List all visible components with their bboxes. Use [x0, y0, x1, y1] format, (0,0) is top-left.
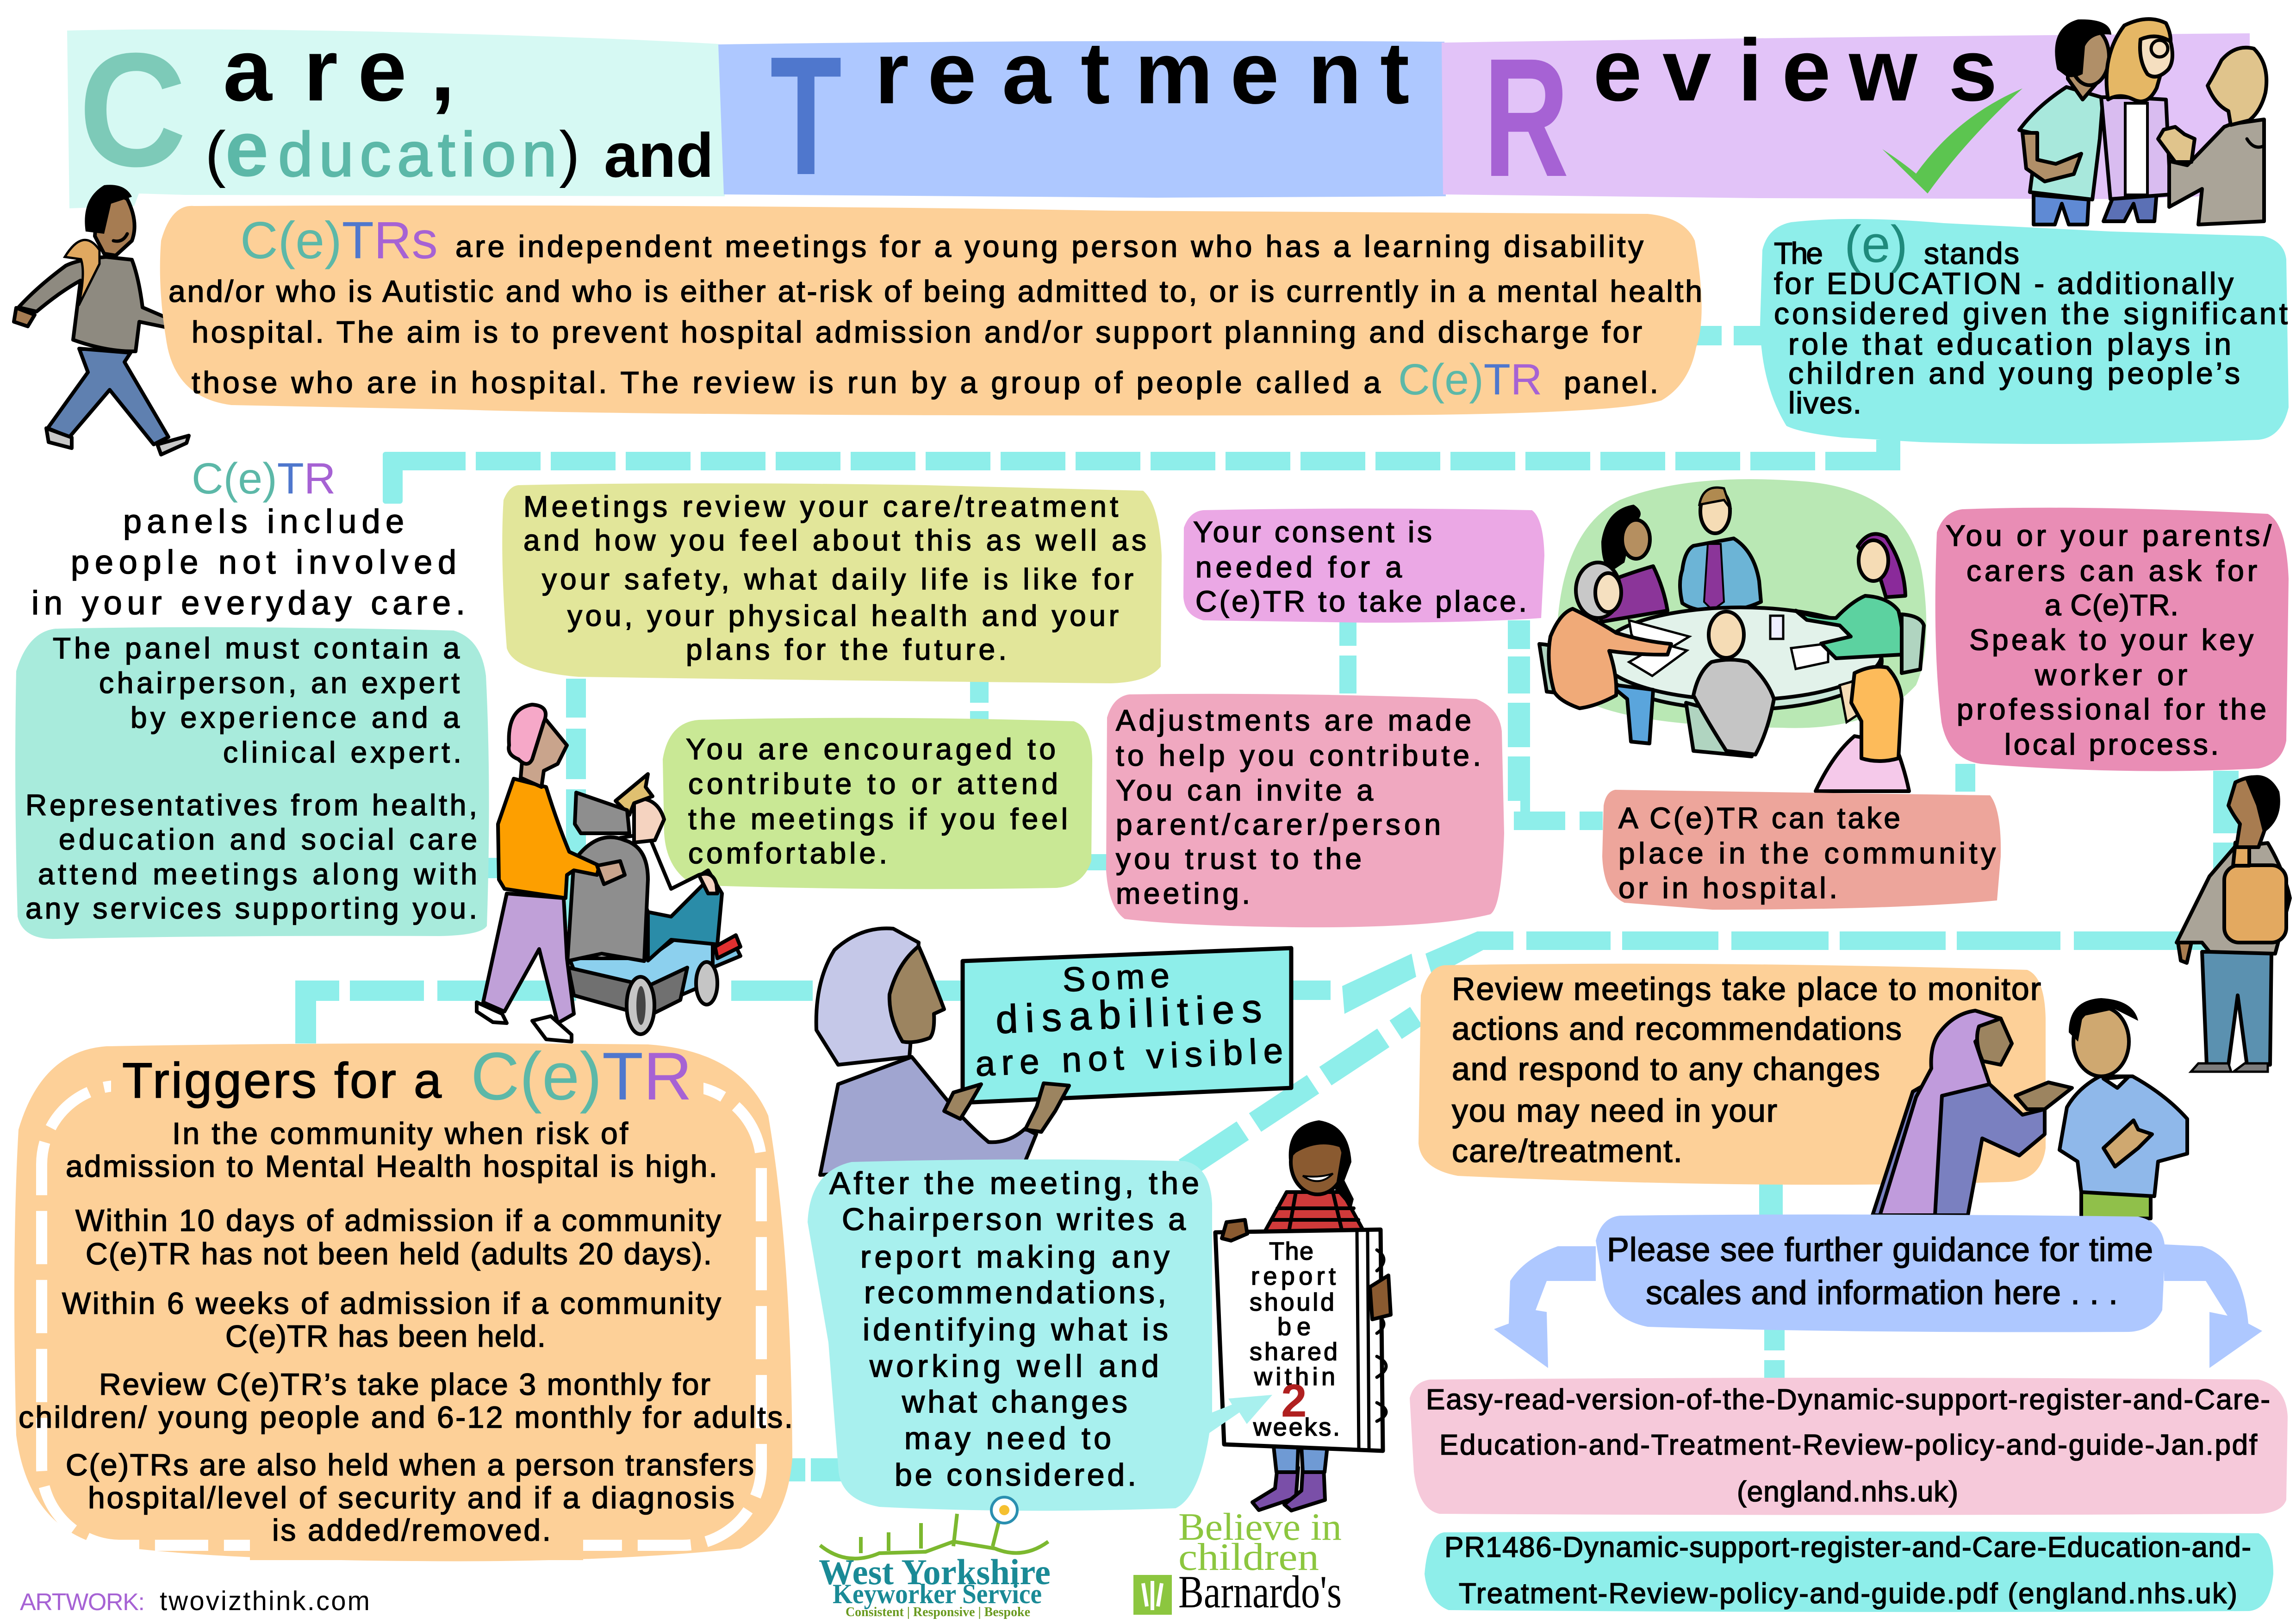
title word: education: ducation [278, 119, 557, 189]
text: you trust to the [1116, 842, 1362, 875]
arrow: from report box to notebook [1203, 1395, 1272, 1437]
text: needed for a [1195, 550, 1402, 584]
hair [2245, 775, 2280, 833]
trigger list: C(e)TR has not been held (adults 20 days). [86, 1237, 712, 1271]
panel background [1760, 219, 2289, 444]
illustration: three people talking [2019, 19, 2266, 225]
title letter T: T [770, 22, 842, 210]
logo service: Keyworker Service [833, 1579, 1042, 1609]
illustration: woman in hijab holding sign [816, 928, 1036, 1175]
glasses [2151, 40, 2168, 57]
head [2228, 777, 2270, 847]
connector: guidance to links [1764, 1329, 1785, 1380]
hair [85, 185, 132, 234]
hand on the top of notebook [1222, 1220, 1247, 1241]
hoodie [19, 257, 176, 351]
text: Representatives from health, [25, 788, 477, 822]
plaid top [1265, 1192, 1364, 1231]
legs of person at left [1609, 684, 1653, 743]
text: actions and recommendations [1452, 1011, 1902, 1047]
panel background [1596, 1214, 2165, 1332]
right chair [1902, 614, 1924, 673]
text: The panel must contain a [53, 631, 460, 665]
title letter R: R [1483, 24, 1569, 212]
panel background [160, 206, 1702, 416]
text: role that education plays in [1788, 327, 2231, 361]
text: Chairperson writes a [842, 1202, 1186, 1237]
text: you may need in your [1452, 1093, 1777, 1129]
text: be considered. [895, 1457, 1136, 1493]
text: children and young people’s [1788, 356, 2240, 390]
man in blue suit [1680, 487, 1761, 611]
person with teal t-shirt [2019, 19, 2111, 225]
logo name: West Yorkshire [819, 1552, 1051, 1592]
text [686, 732, 1068, 870]
hands [14, 308, 35, 326]
wheelchair back [567, 837, 648, 961]
left curved arrow [1494, 1246, 1596, 1368]
smile [1303, 1174, 1333, 1181]
notebook text: be [1277, 1313, 1311, 1341]
illustration: people around a meeting table [1539, 479, 1926, 791]
panel: what meetings review [502, 483, 1162, 683]
person in orange [1549, 562, 1671, 708]
text: for EDUCATION - additionally [1774, 266, 2234, 300]
C(e)TR word: C(e)TR [471, 1038, 692, 1114]
connector: meetings to wheelchair row [566, 679, 586, 928]
sign text: Some [1062, 956, 1170, 999]
connectors: dashed teal lines between panels [295, 326, 2239, 1481]
bracketed e: (e) [1844, 215, 1908, 273]
text: what changes [902, 1384, 1127, 1419]
text: carers can ask for [1966, 554, 2257, 587]
text: Meetings review your care/treatment [523, 490, 1118, 523]
link text: Treatment-Review-policy-and-guide.pdf (england.nhs.uk) [1459, 1578, 2237, 1610]
Barnardo's wordmark: Barnardo's [1178, 1566, 1342, 1618]
connector: encouragement to adjustments [1085, 854, 1108, 870]
text: working well and [869, 1349, 1159, 1384]
trigger list: hospital/level of security and if a diagnosis [88, 1480, 734, 1515]
title letter C: C [79, 19, 187, 200]
shoes [46, 428, 72, 448]
title word: reviews: eviews [1593, 21, 1997, 119]
boots [1252, 1468, 1298, 1510]
text [1946, 519, 2271, 761]
notebook text: within [1254, 1363, 1335, 1391]
artwork label: ARTWORK: [20, 1589, 145, 1616]
connector: row above triggers [295, 981, 966, 1043]
text: C(e)TR to take place. [1195, 585, 1527, 618]
sign text: disabilities [995, 986, 1263, 1042]
notebook text: shared [1250, 1338, 1338, 1366]
trigger list: In the community when risk of [172, 1116, 628, 1150]
standing person pink hair [509, 705, 546, 764]
C(e)TR word: C(e)TR [192, 454, 336, 503]
notebook text [1250, 1237, 1340, 1441]
text: chairperson, an expert [99, 666, 460, 700]
text: any services supporting you. [25, 892, 477, 925]
body [820, 1057, 1036, 1175]
text: and respond to any changes [1452, 1051, 1880, 1087]
heading text: panels include [123, 503, 404, 540]
face [890, 946, 944, 1042]
trigger list: Within 10 days of admission if a community [75, 1203, 721, 1237]
wheelchair frame and footrest [569, 919, 715, 1009]
notebook text: should [1250, 1288, 1334, 1316]
bald person in grey hoodie [2158, 48, 2266, 225]
connector: meetings to encouragement [970, 681, 989, 720]
title word: treatment: reatment [875, 24, 1409, 122]
panel background [1935, 508, 2289, 771]
notebook margin lines [1357, 1231, 1369, 1449]
trigger list: admission to Mental Health hospital is high. [66, 1149, 717, 1183]
banner section: reviews [1442, 33, 2250, 199]
standing person face [521, 720, 567, 787]
connector: community box to parents box [1955, 764, 1975, 792]
text: You are encouraged to [686, 732, 1056, 766]
panel: easy read link [1410, 1378, 2288, 1515]
panel: after the meeting [808, 1159, 1212, 1511]
connector: intro to education note [1697, 326, 1761, 345]
trigger list: is added/removed. [272, 1513, 551, 1547]
right curved arrow [2164, 1244, 2262, 1368]
shoes [2191, 1063, 2268, 1072]
text: parent/carer/person [1116, 808, 1441, 841]
link text [1444, 1531, 2251, 1610]
connector: diagonal from report to row [1185, 1016, 1416, 1169]
left chair [1539, 644, 1580, 695]
text: A C(e)TR can take [1618, 801, 1900, 835]
legs [1274, 1447, 1327, 1472]
connector: sign to top right row [1292, 954, 1416, 1014]
link text [1426, 1384, 2270, 1508]
text: attend meetings along with [38, 857, 477, 891]
illustration: person walking with backpack [14, 185, 189, 455]
woman in purple [1594, 505, 1668, 622]
text: and how you feel about this as well as [523, 524, 1146, 557]
sign text [971, 951, 1284, 1084]
hands holding sign [944, 1084, 981, 1119]
trigger list: Within 6 weeks of admission if a community [62, 1286, 721, 1320]
panel background [1183, 508, 1544, 623]
hijab [816, 928, 919, 1065]
notebook text: report [1251, 1262, 1336, 1290]
C(e)TRs heading word: C(e)TRs [240, 211, 438, 269]
connector: right vertical [2213, 771, 2239, 950]
seated person head and hair [634, 799, 664, 843]
intro text: are independent meetings for a young person who has a learning disability [455, 229, 1643, 263]
title word: education: e [225, 105, 269, 193]
panel background [14, 1043, 792, 1561]
link text: Education-and-Treatment-Review-policy-and-guide-Jan.pdf [1439, 1429, 2258, 1461]
text: report making any [860, 1239, 1170, 1274]
grass line drawing [820, 1509, 1048, 1559]
sign: some disabilities are not visible [944, 948, 1291, 1132]
connector: review to guidance [1759, 1181, 1783, 1218]
trigger list: C(e)TRs are also held when a person transfers [66, 1448, 754, 1482]
panel: review meetings [1419, 964, 2046, 1185]
white dashed inner border [42, 1086, 761, 1545]
text: clinical expert. [223, 736, 461, 769]
mask behind title and footer [111, 1065, 703, 1560]
standing person shoes [477, 1002, 507, 1023]
standing person cardigan [498, 779, 599, 898]
jeans [2202, 952, 2271, 1065]
seated person legs [648, 870, 722, 961]
text [829, 1166, 1199, 1493]
text: comfortable. [688, 837, 887, 870]
text: meeting. [1116, 877, 1250, 910]
connector: consent to community box [1508, 620, 1603, 830]
text: to help you contribute. [1116, 739, 1481, 772]
jacket [2177, 843, 2290, 954]
smile [113, 234, 127, 241]
jeans [48, 349, 168, 444]
heading text [31, 503, 465, 622]
panel background [502, 483, 1162, 683]
illustration: two people in conversation [1873, 998, 2187, 1218]
backpack strap [65, 240, 100, 306]
trigger list: children/ young people and 6-12 monthly for adults. [19, 1400, 793, 1434]
text: lives. [1788, 386, 1861, 420]
icon: green check mark [1882, 88, 2022, 194]
text [1618, 801, 1996, 905]
title word: are: are, [223, 21, 455, 119]
seat base [568, 968, 687, 1016]
text: worker or [2035, 658, 2187, 692]
title banner [67, 19, 2250, 212]
text: plans for the future. [686, 633, 1007, 666]
heading text: in your everyday care. [31, 585, 465, 622]
panel: what are C(e)TRs [160, 206, 1702, 416]
small wheel [696, 962, 717, 1005]
text: education and social care [59, 823, 477, 856]
trigger list: Review C(e)TR’s take place 3 monthly for [99, 1367, 710, 1401]
text: identifying what is [863, 1312, 1168, 1347]
text: recommendations, [864, 1275, 1166, 1310]
text: The [1774, 236, 1823, 270]
seated person top [620, 833, 708, 917]
panel heading: C(e)TR panels include [31, 454, 465, 622]
woman in purple robe [1873, 1011, 2072, 1215]
illustration: person with backpack looking up [2177, 775, 2290, 1072]
woman with blonde hair [1816, 667, 1909, 791]
panel: triggers for a C(e)TR [14, 1038, 793, 1561]
headrest [575, 793, 629, 833]
text: You can invite a [1116, 774, 1373, 807]
logo strapline: Consistent | Responsive | Bespoke [846, 1605, 1030, 1619]
text: considered given the significant [1774, 296, 2288, 331]
hand on the right of notebook [1370, 1275, 1391, 1319]
text: After the meeting, the [829, 1166, 1199, 1201]
text: Please see further guidance for time [1607, 1231, 2153, 1268]
link text: Easy-read-version-of-the-Dynamic-support-register-and-Care- [1426, 1384, 2270, 1416]
text: a C(e)TR. [2045, 588, 2178, 622]
heading text: people not involved [71, 544, 456, 581]
panel background [1410, 1378, 2288, 1515]
connector: education note down [1876, 440, 1900, 470]
text: the meetings if you feel [688, 802, 1068, 836]
intro text: those who are in hospital. The review is run by a group of people called a [192, 365, 1381, 400]
intro text: hospital. The aim is to prevent hospital admission and/or support planning and discharge for [192, 315, 1642, 349]
text: Review meetings take place to monitor [1452, 971, 2041, 1007]
panel: consent [1183, 508, 1544, 623]
main wheel [627, 977, 654, 1034]
title word: education: and [604, 120, 714, 190]
panel: you can ask for a review [1935, 508, 2289, 771]
text [1193, 515, 1527, 618]
panel background [15, 627, 489, 939]
connector: consent to adjustments [1339, 620, 1356, 693]
panel: who is on the panel [15, 627, 489, 939]
connector: triggers to report box [787, 1458, 843, 1481]
highlighted number 2: 2 [1281, 1375, 1307, 1427]
backpack [2224, 865, 2286, 943]
text: Adjustments are made [1116, 704, 1471, 737]
notebook text: weeks. [1253, 1413, 1340, 1441]
intro text [168, 229, 1702, 400]
slogan line one: Believe in [1178, 1505, 1342, 1549]
text [1116, 704, 1481, 910]
connector: left drop to panel heading [383, 452, 403, 504]
text: may need to [904, 1421, 1111, 1456]
flower [991, 1497, 1017, 1523]
artwork site: twovizthink.com [160, 1586, 370, 1616]
text: contribute to or attend [688, 767, 1058, 800]
sign board [963, 948, 1291, 1103]
trigger list: C(e)TR has been held. [225, 1319, 546, 1353]
illustration: person pushing wheelchair user [477, 705, 740, 1042]
connector: top row [391, 452, 1890, 470]
text: Your consent is [1193, 515, 1432, 549]
panel background [1602, 790, 2001, 910]
logo: Barnardo's [1133, 1505, 1342, 1618]
title word: education: ( [205, 119, 226, 188]
text: place in the community [1618, 837, 1996, 870]
panel background [808, 1159, 1212, 1511]
illustration: girl holding report notebook [1203, 1120, 1391, 1511]
head [1291, 1130, 1344, 1194]
text: or in hospital. [1618, 871, 1837, 905]
text: you, your physical health and your [567, 599, 1119, 632]
green square mark [1133, 1575, 1172, 1615]
panel title: Triggers for a [122, 1052, 442, 1108]
panel background [663, 718, 1092, 889]
standing person trousers [483, 893, 574, 1023]
hair and ponytail [1289, 1120, 1354, 1208]
notebook text: The [1269, 1237, 1313, 1265]
C(e)TR inline word: C(e)TR [1398, 355, 1542, 404]
panel: policy link [1425, 1531, 2273, 1612]
text: your safety, what daily life is like for [542, 562, 1133, 596]
person with long blond hair [2101, 19, 2172, 221]
man in blue jumper [2060, 998, 2187, 1218]
panel background [1419, 964, 2046, 1185]
text: local process. [2004, 728, 2219, 761]
green background blob [1556, 479, 1926, 728]
text: scales and information here . . . [1646, 1274, 2118, 1312]
text [1774, 236, 2288, 420]
standing person hand on handle [597, 861, 625, 884]
woman with purple hair [1796, 534, 1905, 658]
panel: encouraged to contribute [663, 718, 1092, 889]
notebook rings [1377, 1250, 1386, 1421]
banner section: treatment [718, 41, 1446, 198]
text [1452, 971, 2041, 1169]
text [1607, 1231, 2153, 1312]
connector: panel box to encouragement [486, 858, 518, 878]
banner section: care [67, 29, 725, 208]
text [25, 631, 477, 925]
title word: education [205, 105, 714, 193]
panel: what the e stands for [1760, 215, 2289, 444]
text: You or your parents/ [1946, 519, 2271, 552]
panel: further guidance with curved arrows [1494, 1214, 2262, 1368]
trigger list [19, 1116, 793, 1547]
link text: (england.nhs.uk) [1737, 1476, 1958, 1508]
table [1599, 607, 1882, 710]
text [523, 490, 1146, 666]
slogan line two: children [1178, 1536, 1319, 1579]
head [95, 195, 135, 256]
panel: where reviews take place [1602, 790, 2001, 910]
link text: PR1486-Dynamic-support-register-and-Care-Education-and- [1444, 1531, 2251, 1563]
panel background [1106, 694, 1504, 927]
panel: adjustments [1106, 694, 1504, 927]
notebook page [1215, 1230, 1383, 1451]
panel background [1425, 1531, 2273, 1612]
logo: West Yorkshire Keyworker Service [819, 1497, 1051, 1619]
text: by experience and a [131, 701, 460, 734]
text: professional for the [1957, 693, 2266, 726]
text: stands [1924, 236, 2019, 270]
man in grey from behind [1686, 612, 1774, 756]
intro text: panel. [1564, 365, 1658, 400]
text: care/treatment. [1452, 1133, 1682, 1169]
sign text: are not visible [975, 1031, 1284, 1084]
text: Speak to your key [1969, 623, 2253, 656]
artwork credit [20, 1586, 370, 1616]
hand [2178, 943, 2191, 963]
title word: education: ) [559, 119, 580, 188]
intro text: and/or who is Autistic and who is either at-risk of being admitted to, or is currently in a mental health [168, 274, 1702, 308]
seated person hand [699, 874, 717, 893]
